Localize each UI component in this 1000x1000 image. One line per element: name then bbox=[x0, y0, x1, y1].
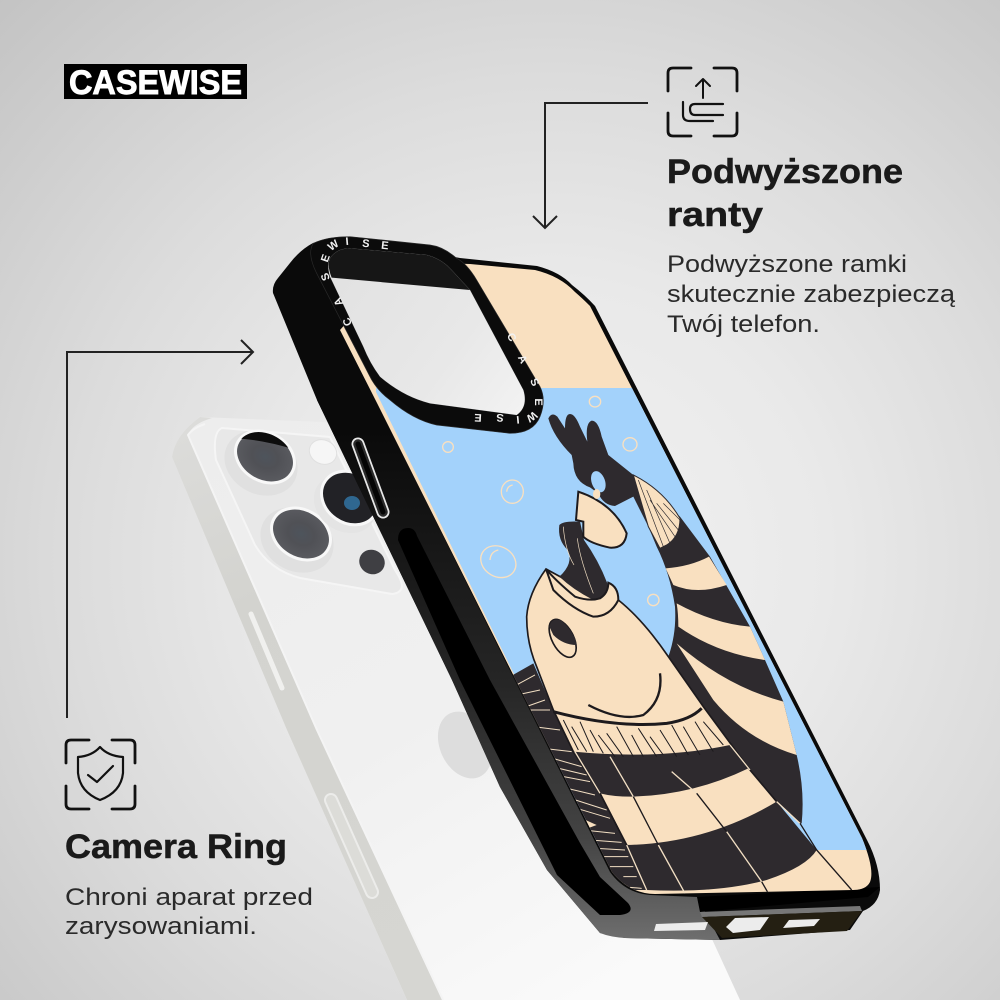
case side rim bbox=[317, 400, 720, 940]
white phone bbox=[172, 417, 740, 1000]
phone edge highlight bbox=[188, 424, 443, 1000]
ring lettering: W bbox=[523, 408, 539, 424]
heading: Podwyższone ranty bbox=[667, 153, 903, 234]
tail fin bbox=[633, 475, 680, 548]
text: camera ring description: Chroni aparat przed bbox=[65, 884, 313, 911]
bottom band bbox=[702, 911, 862, 938]
ring lettering: I bbox=[516, 413, 520, 425]
heading: Podwyższone ranty: Podwyższone bbox=[667, 153, 903, 191]
hand shadow bbox=[548, 414, 648, 527]
ring inner wall bbox=[329, 248, 470, 290]
case artwork: fish bbox=[340, 264, 872, 894]
camera ring bbox=[311, 236, 544, 433]
gill fringe bbox=[563, 720, 723, 757]
scale lines bbox=[575, 745, 852, 893]
ring lettering: S bbox=[362, 238, 370, 250]
bubbles bbox=[443, 396, 659, 606]
gill line bbox=[553, 708, 702, 724]
charging and speaker cutouts bbox=[654, 917, 820, 933]
ring lettering: C bbox=[504, 331, 518, 344]
ring body bbox=[311, 237, 543, 433]
ring lettering: E bbox=[381, 240, 389, 252]
text: camera ring description: zarysowaniami. bbox=[65, 913, 257, 940]
icon: raised edges bbox=[668, 68, 737, 136]
icon: shield check bbox=[66, 740, 135, 809]
phone case bbox=[273, 237, 880, 940]
camera bump and lenses bbox=[224, 430, 385, 574]
body band two bbox=[627, 802, 817, 891]
ring lettering: S bbox=[527, 377, 541, 388]
stream from upper mouth bbox=[559, 521, 608, 600]
left fin bbox=[507, 663, 647, 890]
ring lettering: A bbox=[515, 353, 529, 366]
lower lip bbox=[546, 569, 618, 617]
side buttons bbox=[251, 614, 372, 892]
heading: Podwyższone ranty: ranty bbox=[667, 196, 763, 234]
ring lettering: I bbox=[345, 236, 349, 248]
art background bbox=[340, 264, 872, 894]
heading: Camera Ring: Camera Ring bbox=[65, 828, 287, 866]
apple logo bbox=[428, 703, 502, 787]
bottom lip bbox=[697, 887, 880, 912]
logo: CASEWISE: CASEWISE bbox=[69, 64, 242, 102]
upper lip shape bbox=[576, 492, 627, 548]
text: camera ring description bbox=[65, 884, 313, 940]
ring lettering: S bbox=[319, 271, 333, 282]
ring lettering bbox=[319, 236, 544, 425]
ring lettering: A bbox=[332, 295, 346, 308]
case frame bbox=[273, 237, 880, 940]
ring lettering: W bbox=[326, 238, 342, 254]
arrow: to raised edges bbox=[533, 103, 648, 228]
arrow: to camera ring bbox=[67, 340, 253, 718]
blue panel bbox=[376, 388, 868, 850]
text: raised edges description: Podwyższone ramki bbox=[667, 251, 907, 278]
text: raised edges description bbox=[667, 251, 956, 338]
ring lettering: E bbox=[474, 411, 482, 423]
black side channel bbox=[398, 528, 631, 915]
ring lettering: S bbox=[496, 411, 504, 423]
case side button bbox=[358, 444, 383, 512]
body band one bbox=[573, 745, 748, 797]
ring lettering: E bbox=[532, 398, 544, 406]
ring opening bbox=[328, 248, 525, 415]
smile bbox=[588, 673, 660, 717]
text: raised edges description: skutecznie zabezpieczą bbox=[667, 281, 956, 308]
striped tail body bbox=[649, 515, 803, 824]
fish head and lower body bbox=[527, 569, 777, 873]
ring lettering: C bbox=[341, 315, 355, 328]
eye bbox=[548, 618, 577, 658]
phone side band bbox=[172, 417, 443, 1000]
ring lettering: E bbox=[319, 253, 333, 264]
phone body bbox=[172, 417, 740, 1000]
tail stripes bbox=[666, 557, 797, 755]
text: raised edges description: Twój telefon. bbox=[667, 311, 820, 338]
